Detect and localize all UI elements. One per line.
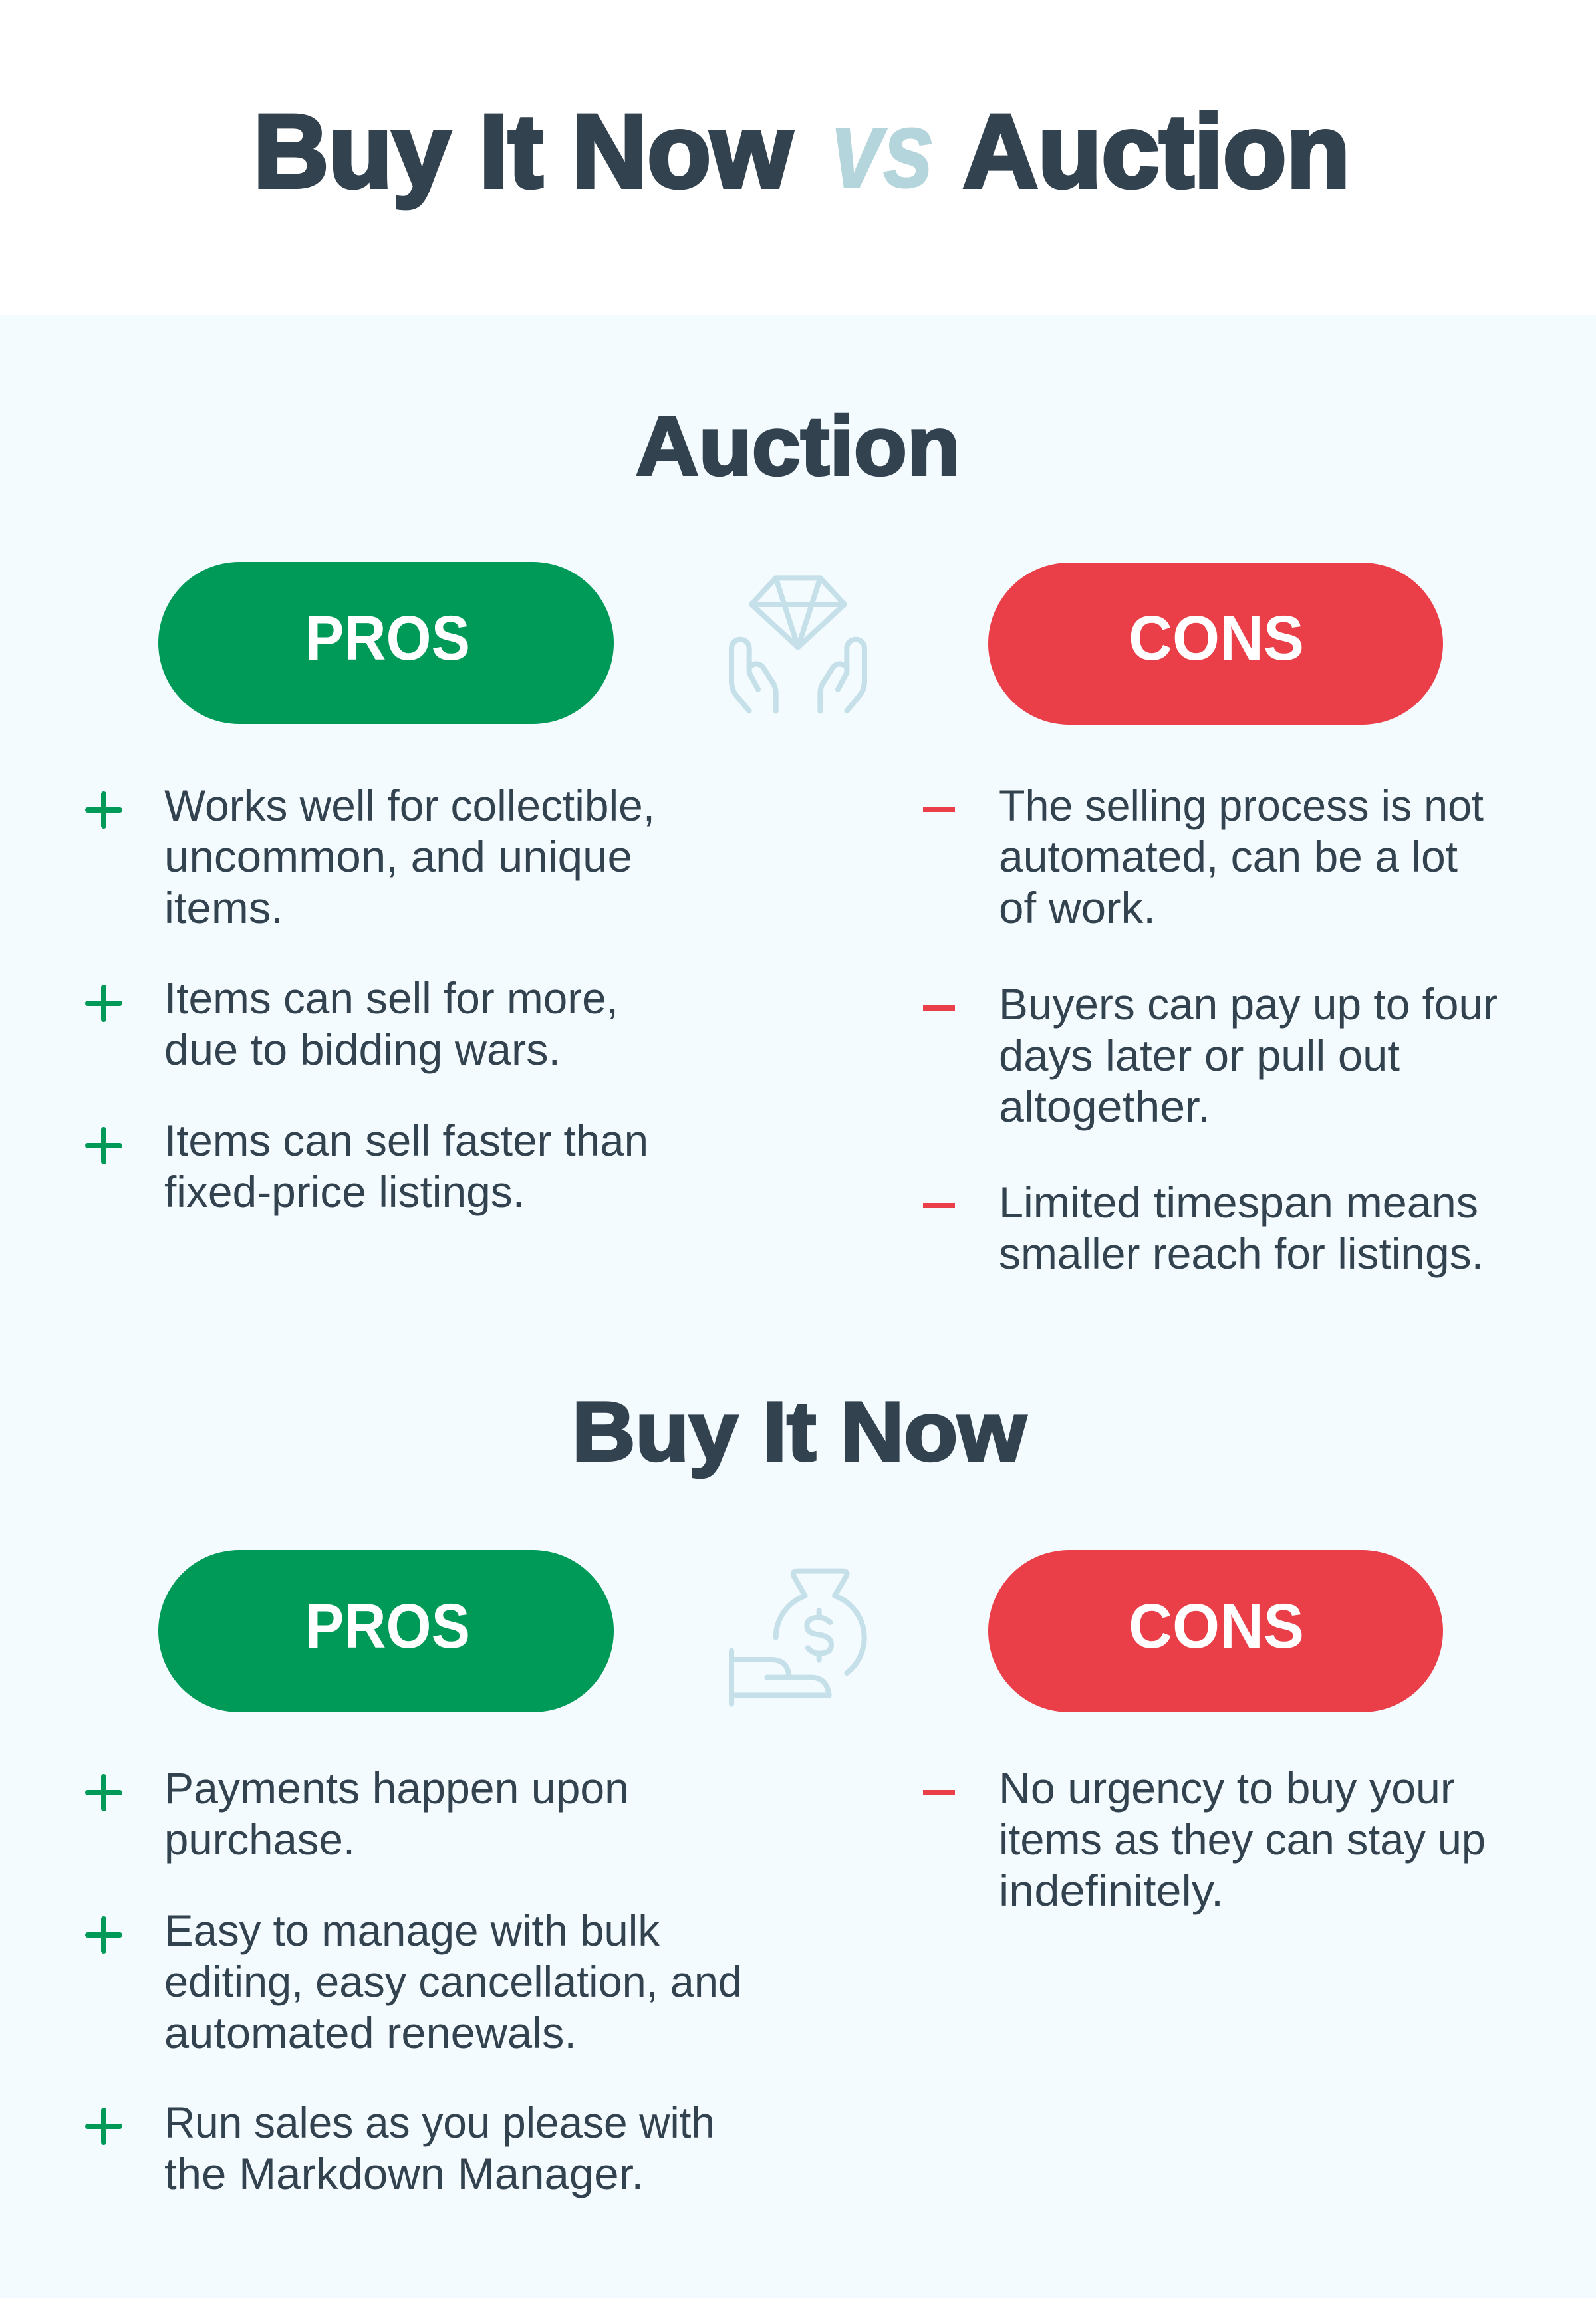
auction pro 1: uncommon, and unique (164, 832, 632, 881)
pros pill: PROS (305, 1591, 470, 1662)
buy it now con 1: indefinitely. (999, 1866, 1224, 1915)
buy it now pro 2: editing, easy cancellation, and (164, 1957, 742, 2006)
pros pill: PROS (305, 603, 470, 674)
auction con 1: automated, can be a lot (999, 832, 1458, 881)
auction con 3: smaller reach for listings. (999, 1229, 1484, 1278)
buy it now pro 1 (88, 1763, 629, 1864)
title: Auction (963, 94, 1350, 209)
buy it now pro 1: Payments happen upon (164, 1763, 629, 1813)
auction pro 2: Items can sell for more, (164, 973, 618, 1023)
icon: diamond held in hands (732, 578, 864, 711)
heading: Auction: Auction (636, 399, 960, 493)
auction con 2: Buyers can pay up to four (999, 979, 1498, 1029)
auction con 3: Limited timespan means (999, 1178, 1478, 1227)
buy it now pro 1: purchase. (164, 1815, 355, 1864)
cons pill: CONS (1129, 1591, 1304, 1662)
cons pill: CONS (1129, 603, 1304, 674)
pros pill (158, 1550, 614, 1712)
icon: money bag over hand (732, 1571, 864, 1704)
auction pro 2 (88, 973, 618, 1074)
auction con 3 (923, 1178, 1484, 1278)
auction pro 3 (88, 1116, 648, 1216)
auction con 1: of work. (999, 883, 1156, 932)
auction con 1: The selling process is not (999, 781, 1484, 830)
pros pill (158, 562, 614, 724)
auction pro 2: due to bidding wars. (164, 1025, 561, 1074)
auction con 2: altogether. (999, 1082, 1210, 1131)
auction con 2 (923, 979, 1498, 1131)
title: vs (831, 88, 934, 210)
buy it now con 1: items as they can stay up (999, 1815, 1486, 1864)
auction pro 1: items. (164, 883, 283, 932)
auction pro 3: fixed-price listings. (164, 1167, 525, 1216)
buy it now pro 2 (88, 1906, 742, 2057)
auction con 2: days later or pull out (999, 1031, 1400, 1080)
buy it now pro 3 (88, 2098, 715, 2198)
panel: auction section (88, 399, 1498, 1278)
buy it now pro 2: automated renewals. (164, 2008, 577, 2057)
cons pill (988, 563, 1443, 725)
auction pro 1 (88, 781, 655, 932)
title (253, 88, 1350, 210)
title: Buy It Now (253, 94, 793, 209)
panel: buy it now section (88, 1384, 1486, 2198)
heading: Buy It Now: Buy It Now (572, 1384, 1027, 1478)
buy it now pro 2: Easy to manage with bulk (164, 1906, 660, 1955)
buy it now pro 3: the Markdown Manager. (164, 2149, 644, 2198)
buy it now con 1: No urgency to buy your (999, 1763, 1455, 1813)
auction pro 1: Works well for collectible, (164, 781, 655, 830)
auction con 1 (923, 781, 1484, 932)
buy it now pro 3: Run sales as you please with (164, 2098, 715, 2147)
cons pill (988, 1550, 1443, 1712)
auction pro 3: Items can sell faster than (164, 1116, 648, 1165)
buy it now con 1 (923, 1763, 1486, 1915)
